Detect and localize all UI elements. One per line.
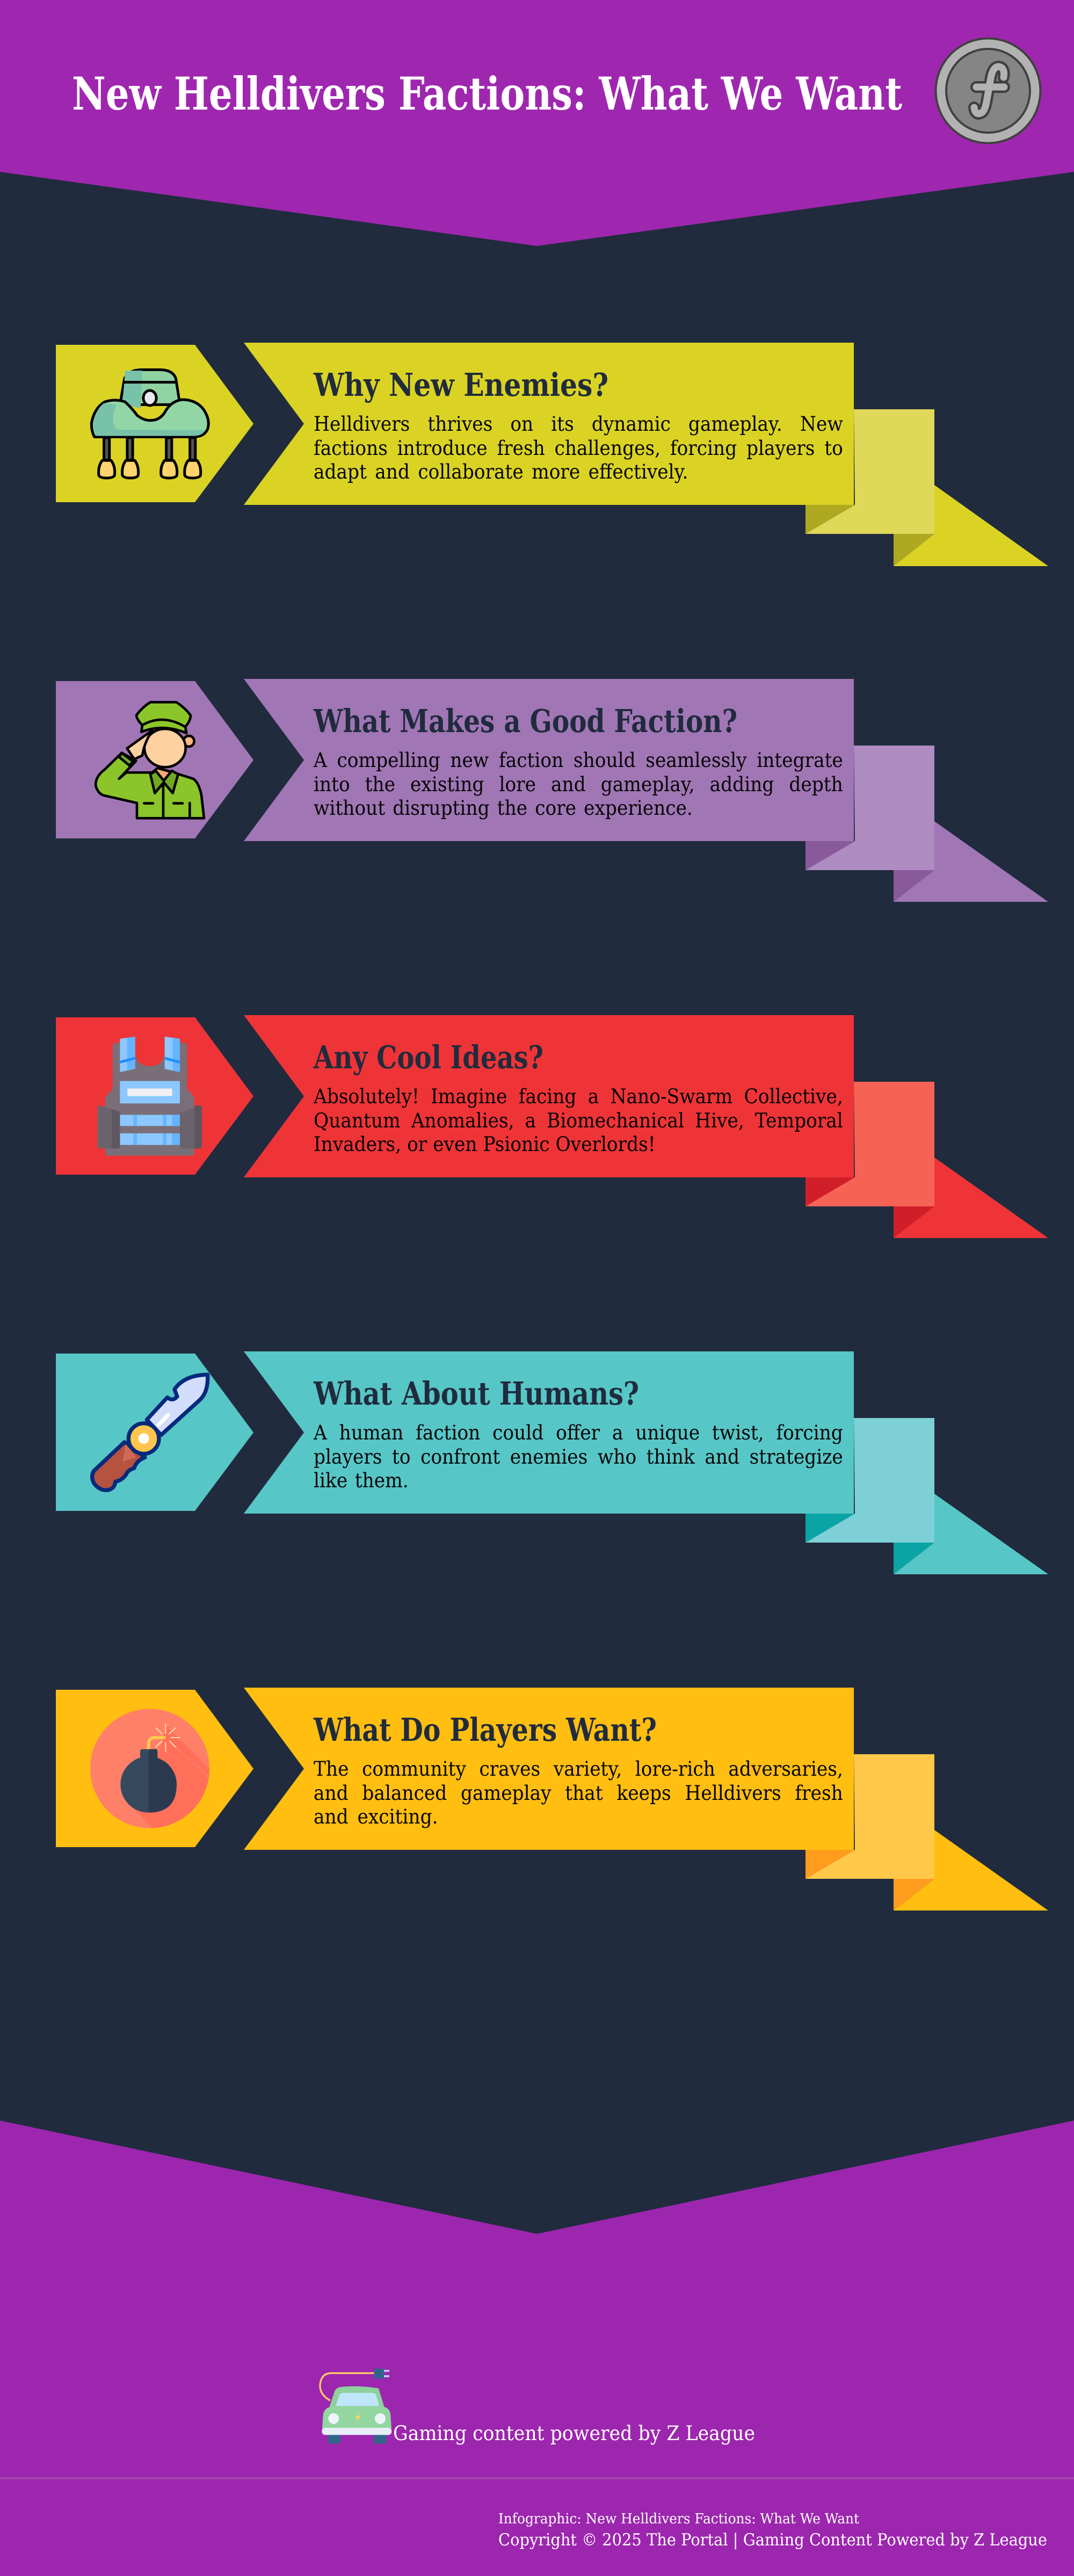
title: New Helldivers Factions: What We Want xyxy=(72,67,902,120)
heading: What Makes a Good Faction? xyxy=(313,703,737,740)
heading: Why New Enemies? xyxy=(313,366,608,403)
ribbon shapes xyxy=(56,1351,1048,1574)
ribbon shapes xyxy=(56,1688,1048,1911)
footer tagline: Gaming content powered by Z League xyxy=(393,2422,755,2445)
copyright line: Copyright © 2025 The Portal | Gaming Content Powered by Z League xyxy=(498,2530,1047,2550)
heading: Any Cool Ideas? xyxy=(313,1039,543,1076)
icon: bomb xyxy=(90,1709,209,1828)
body text: without disrupting the core experience. xyxy=(314,797,693,820)
heading: What About Humans? xyxy=(313,1375,639,1412)
heading: What Do Players Want? xyxy=(313,1711,657,1748)
panel: what do players want xyxy=(56,1688,1048,1911)
ribbon shapes xyxy=(56,343,1048,566)
body text: Helldivers thrives on its dynamic gameplay. New xyxy=(314,413,843,436)
body text: players to confront enemies who think and strategize xyxy=(314,1445,843,1468)
body text xyxy=(314,1757,843,1828)
body text: factions introduce fresh challenges, forcing players to xyxy=(314,437,843,460)
panel: any cool ideas xyxy=(56,1015,1048,1238)
body text: Quantum Anomalies, a Biomechanical Hive, Temporal xyxy=(314,1109,843,1132)
body text: into the existing lore and gameplay, adding depth xyxy=(314,773,843,796)
body text: like them. xyxy=(314,1469,409,1492)
body text: adapt and collaborate more effectively. xyxy=(314,460,688,483)
body text xyxy=(314,749,843,820)
body text: The community craves variety, lore-rich adversaries, xyxy=(314,1757,843,1781)
icon: armored vest xyxy=(98,1037,202,1156)
panel: what about humans xyxy=(56,1351,1048,1574)
body text xyxy=(314,1085,843,1156)
body text: and exciting. xyxy=(314,1805,438,1828)
infographic credit line: Infographic: New Helldivers Factions: What We Want xyxy=(498,2511,860,2527)
body text: Invaders, or even Psionic Overlords! xyxy=(314,1133,656,1156)
footer band xyxy=(0,2121,1074,2576)
body text: A compelling new faction should seamlessly integrate xyxy=(314,749,843,772)
body text xyxy=(314,1421,843,1492)
panel: what makes a good faction xyxy=(56,679,1048,902)
body text xyxy=(314,413,843,483)
header band xyxy=(0,0,1074,246)
ribbon shapes xyxy=(56,1015,1048,1238)
icon: logo coin xyxy=(934,38,1042,144)
icon: robot xyxy=(90,368,210,479)
body text: and balanced gameplay that keeps Helldivers fresh xyxy=(314,1782,843,1805)
body text: Absolutely! Imagine facing a Nano-Swarm Collective, xyxy=(314,1085,843,1108)
icon: electric car xyxy=(319,2369,392,2444)
body text: A human faction could offer a unique twist, forcing xyxy=(314,1421,843,1444)
icon: knife xyxy=(90,1373,209,1492)
panel: why new enemies xyxy=(56,343,1048,566)
icon: saluting soldier xyxy=(95,701,205,820)
ribbon shapes xyxy=(56,679,1048,902)
